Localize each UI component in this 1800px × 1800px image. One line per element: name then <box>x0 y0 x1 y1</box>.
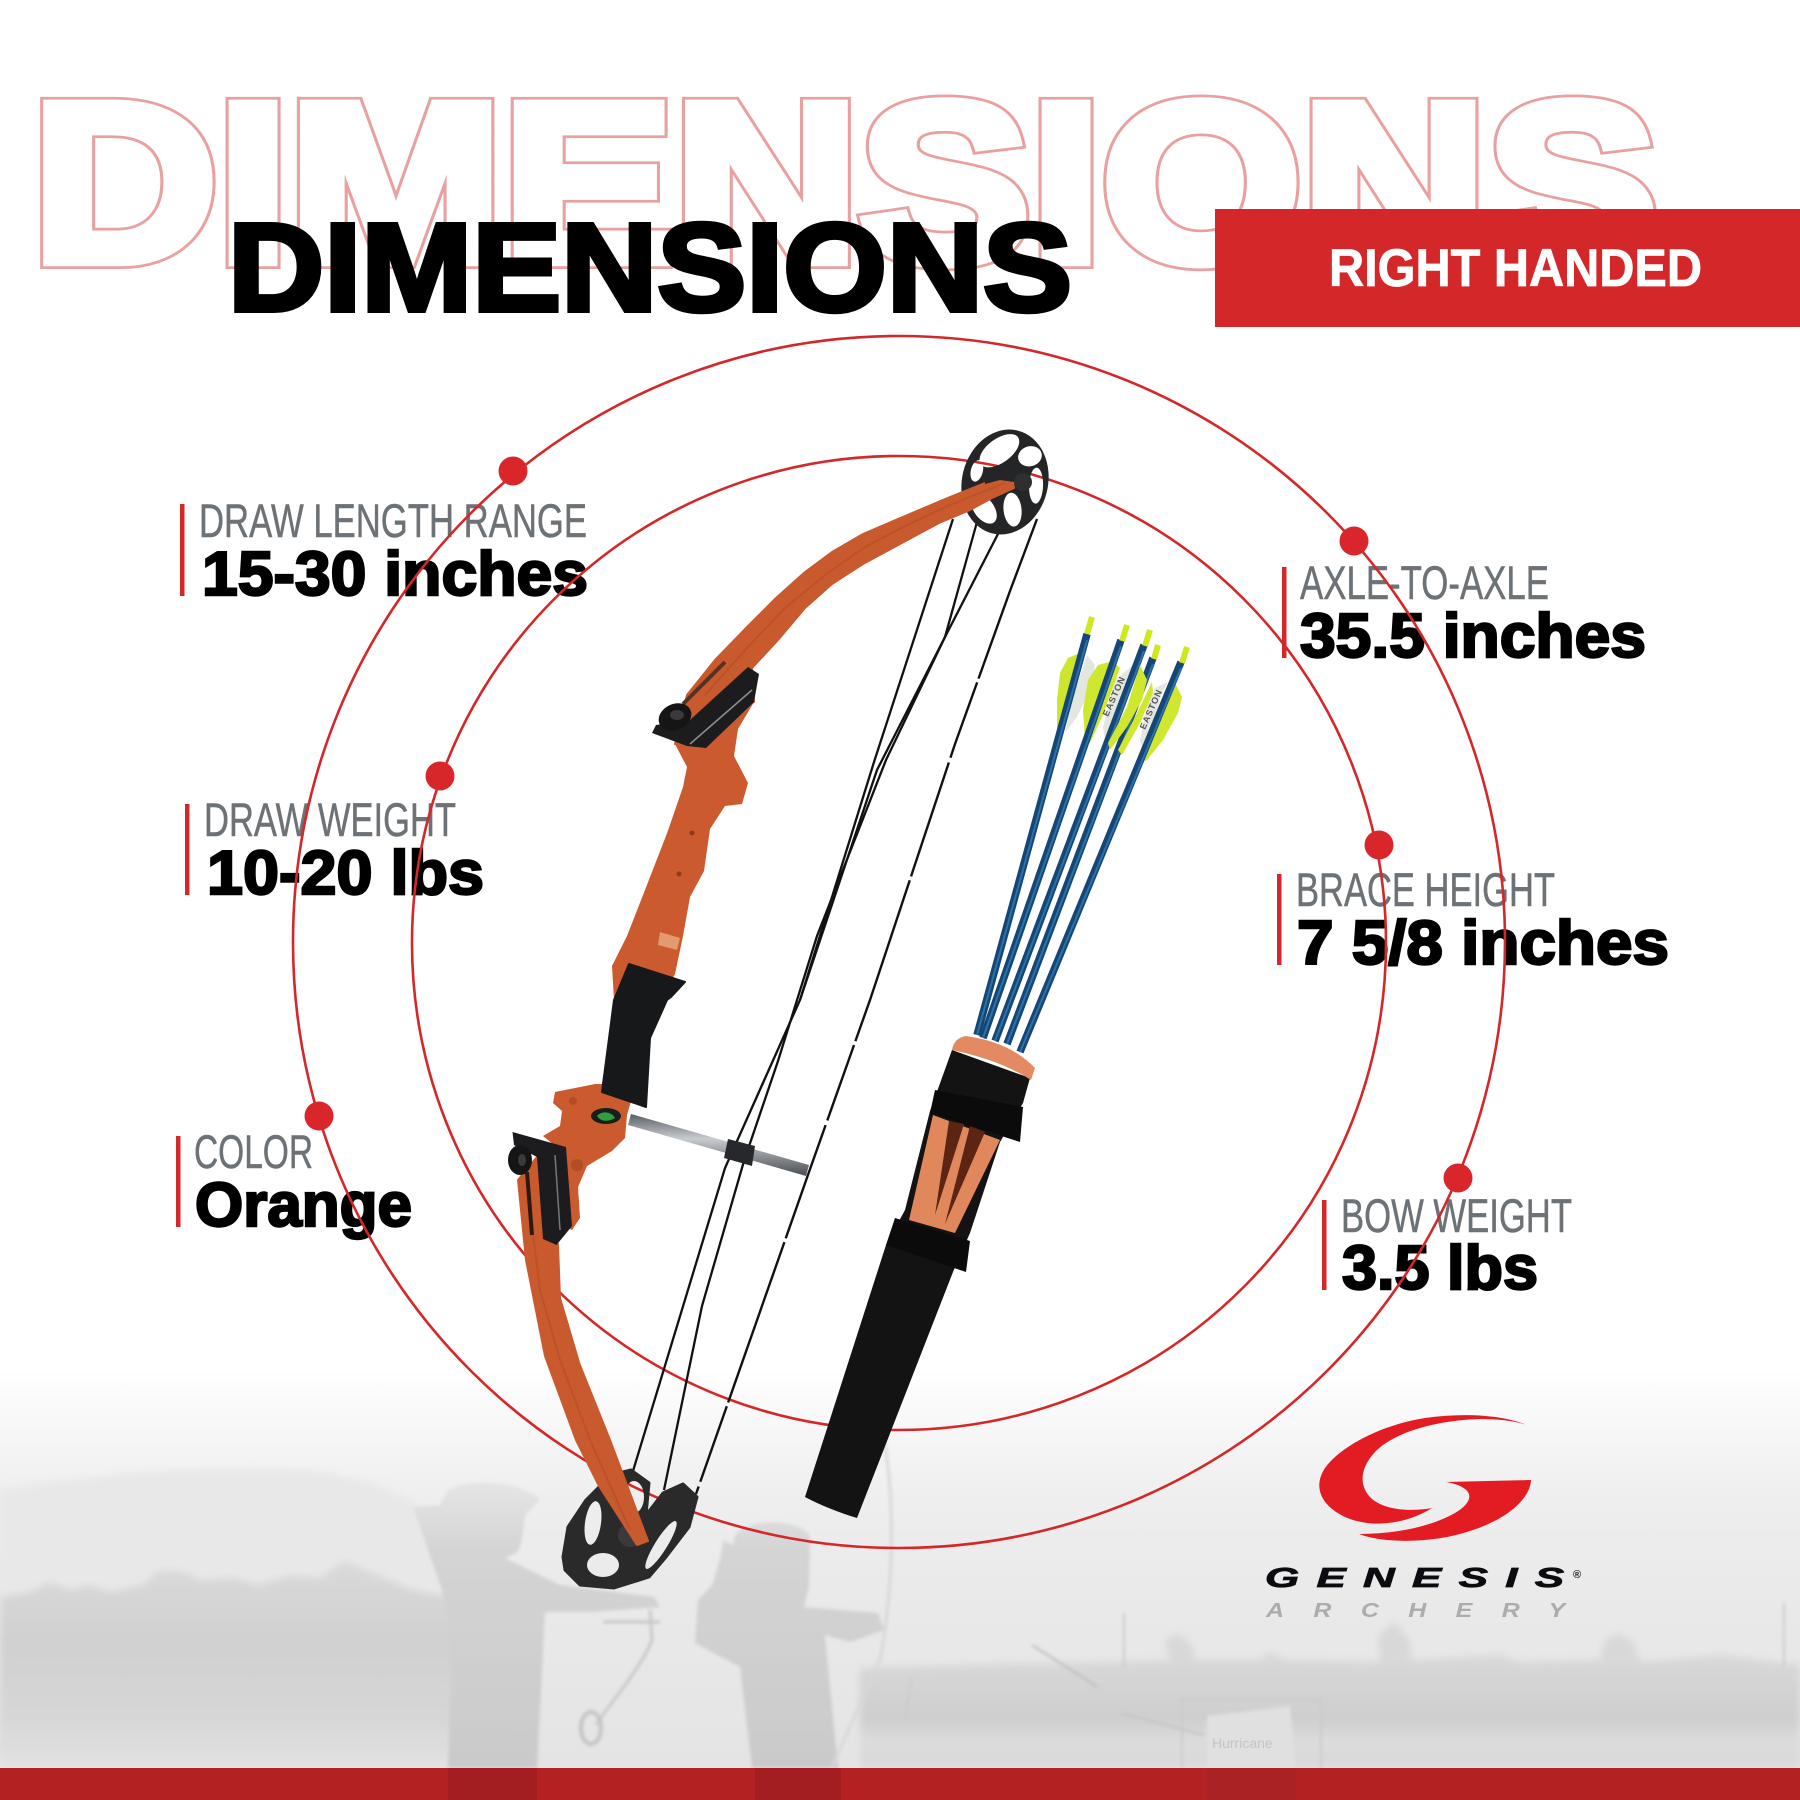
logo: Genesis Archery <box>1265 1415 1595 1621</box>
logo mark <box>1319 1415 1531 1541</box>
spec: draw length range: DRAW LENGTH RANGE <box>199 494 587 547</box>
riser handle <box>543 702 754 1230</box>
background: misty archery field photo <box>0 1370 1800 1770</box>
spec: draw length range: 15-30 inches <box>202 540 588 609</box>
spec: bow weight: 3.5 lbs <box>1342 1234 1538 1303</box>
outlined background title: DIMENSIONS <box>32 57 1658 310</box>
spec: brace height <box>1277 863 1669 978</box>
quiver mesh window <box>909 1115 1000 1233</box>
arrow 5 <box>1020 647 1187 1052</box>
quiver rim <box>952 1036 1035 1080</box>
logo subtitle: ARCHERY <box>1265 1599 1595 1621</box>
spec: axle-to-axle: AXLE-TO-AXLE <box>1300 556 1549 609</box>
spec: brace height: BRACE HEIGHT <box>1296 863 1555 916</box>
spec: draw length range <box>180 494 588 609</box>
grip <box>602 964 685 1107</box>
banner: right handed: RIGHT HANDED <box>1329 239 1702 298</box>
title: DIMENSIONS <box>228 198 1072 338</box>
concentric circles with marker dots <box>293 336 1505 1548</box>
banner: right handed <box>1215 209 1800 327</box>
arrow 3 <box>995 630 1150 1041</box>
lower limb <box>518 1157 648 1545</box>
logo registered mark: ® <box>1573 1569 1581 1581</box>
spec: brace height: 7 5/8 inches <box>1297 909 1669 978</box>
arrow 2 <box>983 625 1133 1038</box>
upper cam wheel <box>961 430 1049 534</box>
icon: five arrows <box>977 617 1187 1052</box>
spec: axle-to-axle: 35.5 inches <box>1300 602 1646 671</box>
upper limb pocket <box>652 667 759 748</box>
lower cam <box>563 1470 697 1588</box>
spec: bow weight: BOW WEIGHT <box>1341 1189 1572 1242</box>
lower limb pocket <box>508 1132 572 1245</box>
spec: axle-to-axle <box>1282 556 1646 671</box>
spec: draw weight: 10-20 lbs <box>207 839 484 908</box>
bottom red band <box>0 1768 1800 1800</box>
spec: color <box>176 1125 412 1240</box>
cable guard rod <box>628 1114 809 1176</box>
logo wordmark: GENESIS <box>1265 1562 1581 1593</box>
spec: color: COLOR <box>194 1125 313 1178</box>
arrow 4 <box>1007 645 1158 1044</box>
riser badge <box>591 1108 621 1124</box>
upper limb <box>675 468 1032 744</box>
bow strings and cables <box>633 519 1037 1494</box>
icon: orange compound bow <box>508 420 1060 1588</box>
quiver body <box>805 1050 1030 1518</box>
arrow 1 <box>977 617 1095 1035</box>
spec: bow weight <box>1322 1189 1572 1303</box>
spec: draw weight <box>185 793 484 908</box>
spec: draw weight: DRAW WEIGHT <box>204 793 456 846</box>
quiver straps <box>886 1090 1023 1272</box>
background: misty archery field photo: Hurricane <box>1212 1735 1273 1751</box>
spec: color: Orange <box>195 1171 412 1240</box>
arrow 2: EASTON <box>1101 675 1127 718</box>
arrow 5: EASTON <box>1138 688 1164 731</box>
outlined background title: DIMENSIONS <box>32 57 1658 310</box>
icon: quiver <box>805 1036 1035 1518</box>
